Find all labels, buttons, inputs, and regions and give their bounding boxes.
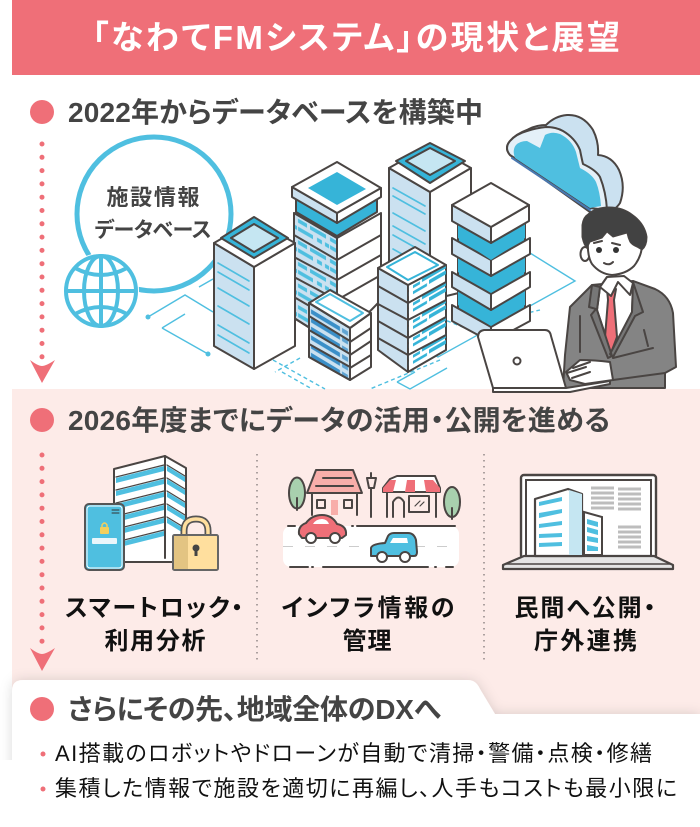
building — [114, 456, 186, 562]
collar — [600, 276, 633, 296]
padlock — [173, 519, 218, 570]
panel: 2026 section background — [12, 389, 700, 714]
server tower left — [214, 217, 295, 369]
phone — [85, 504, 124, 570]
tie — [605, 289, 617, 353]
timeline arrow 2 — [30, 455, 55, 671]
title band — [12, 0, 700, 75]
circle: facility database — [77, 137, 231, 291]
section 2 heading: 2026年度までにデータの活用・公開を進める — [68, 404, 610, 436]
panel: future DX: 集積した情報で施設を適切に再編し、人手もコストも最小限に — [55, 776, 677, 801]
road — [283, 526, 459, 567]
icon: town with road and cars — [283, 470, 460, 567]
icon: laptop with building — [503, 475, 673, 569]
panel: future DX: AI搭載のロボットやドローンが自動で清掃・警備・点検・修繕 — [55, 741, 652, 766]
label: infrastructure — [282, 595, 454, 655]
building on screen — [535, 489, 582, 556]
server tower back right — [389, 143, 471, 300]
face — [588, 225, 642, 275]
panel: future DX — [0, 680, 700, 827]
icon: cloud — [507, 115, 623, 212]
server tower front dark blue — [309, 290, 371, 380]
circle label: 施設情報 — [106, 185, 200, 210]
section 1 heading: 2022年からデータベースを構築中 — [68, 96, 483, 128]
laptop: person's laptop — [478, 330, 610, 392]
lapels — [589, 282, 643, 358]
trees — [289, 478, 460, 519]
blue car — [371, 533, 417, 562]
timeline arrow 1 — [30, 144, 55, 383]
house — [307, 470, 362, 515]
hair — [582, 207, 647, 250]
panel: future DX: さらにその先、地域全体のDXへ — [68, 694, 442, 725]
server tower brick — [292, 162, 381, 345]
ground circuit lines — [146, 253, 575, 389]
server tower stacked — [452, 183, 530, 342]
hand — [566, 360, 613, 384]
dotted column dividers — [257, 454, 484, 664]
text lines on screen — [591, 488, 641, 547]
street lamp — [367, 473, 376, 517]
suit — [563, 281, 676, 388]
icon: globe — [63, 253, 139, 329]
red car — [299, 515, 346, 543]
label: smart lock: スマートロック・ — [65, 595, 243, 622]
label: infrastructure: インフラ情報の — [282, 595, 454, 622]
label: smart lock: 利用分析 — [104, 628, 206, 655]
ear — [580, 247, 590, 261]
section 3 heading — [30, 697, 54, 721]
label: public release: 庁外連携 — [534, 628, 637, 655]
person: businessman — [563, 207, 676, 388]
icon: building with smart lock — [85, 456, 218, 570]
title: 「なわてFMシステム」の現状と展望 — [92, 19, 620, 56]
circle: facility database: データベース — [94, 218, 212, 242]
label: infrastructure: 管理 — [342, 628, 392, 655]
label: public release — [514, 595, 656, 655]
laptop body — [521, 475, 656, 558]
shop — [383, 476, 440, 517]
shirt — [597, 277, 633, 355]
bullet list — [40, 752, 46, 756]
server tower front middle — [378, 247, 446, 372]
label: smart lock — [65, 595, 243, 655]
label: public release: 民間へ公開・ — [514, 595, 656, 622]
